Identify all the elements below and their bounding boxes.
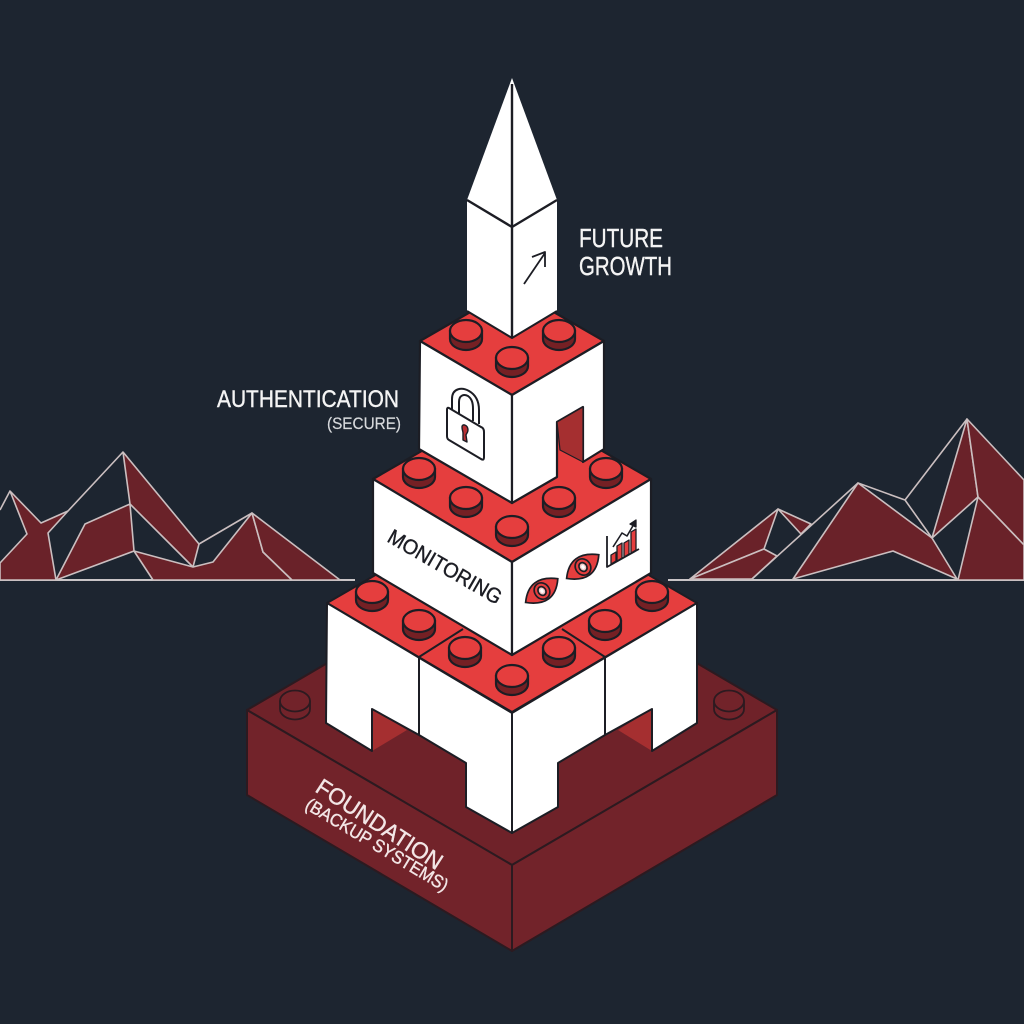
future growth label xyxy=(579,223,672,281)
foundation stud right xyxy=(714,690,744,720)
notch inner faces xyxy=(372,709,652,751)
base right white face xyxy=(512,603,697,833)
right low-poly mountains xyxy=(690,419,1024,580)
base brick layer xyxy=(326,496,697,833)
monitoring label: MONITORING xyxy=(384,525,506,609)
authentication label: (SECURE) xyxy=(327,414,401,433)
icon: padlock xyxy=(447,389,484,460)
doorway inner face xyxy=(557,407,583,462)
foundation label: (BACKUP SYSTEMS) xyxy=(302,794,452,895)
future growth label: FUTURE xyxy=(579,223,663,253)
spire block xyxy=(467,78,557,338)
base left white face xyxy=(326,603,512,833)
icon: bar chart with trend arrow xyxy=(607,520,639,567)
future growth label: GROWTH xyxy=(579,251,672,281)
monitoring block xyxy=(373,399,651,655)
horizon line xyxy=(0,579,1024,581)
foundation label: FOUNDATION xyxy=(311,773,448,875)
monitoring studs xyxy=(403,458,622,546)
base studs xyxy=(356,581,668,695)
foundation stud left xyxy=(280,690,310,720)
icon: growth arrow xyxy=(524,252,545,284)
authentication label xyxy=(217,386,401,433)
icon: eye right xyxy=(560,547,605,587)
authentication label: AUTHENTICATION xyxy=(217,386,399,413)
authentication studs xyxy=(450,320,575,377)
icon: eye left xyxy=(519,571,564,611)
left low-poly mountains xyxy=(0,452,340,580)
foundation block xyxy=(247,555,777,951)
authentication block xyxy=(419,288,604,503)
